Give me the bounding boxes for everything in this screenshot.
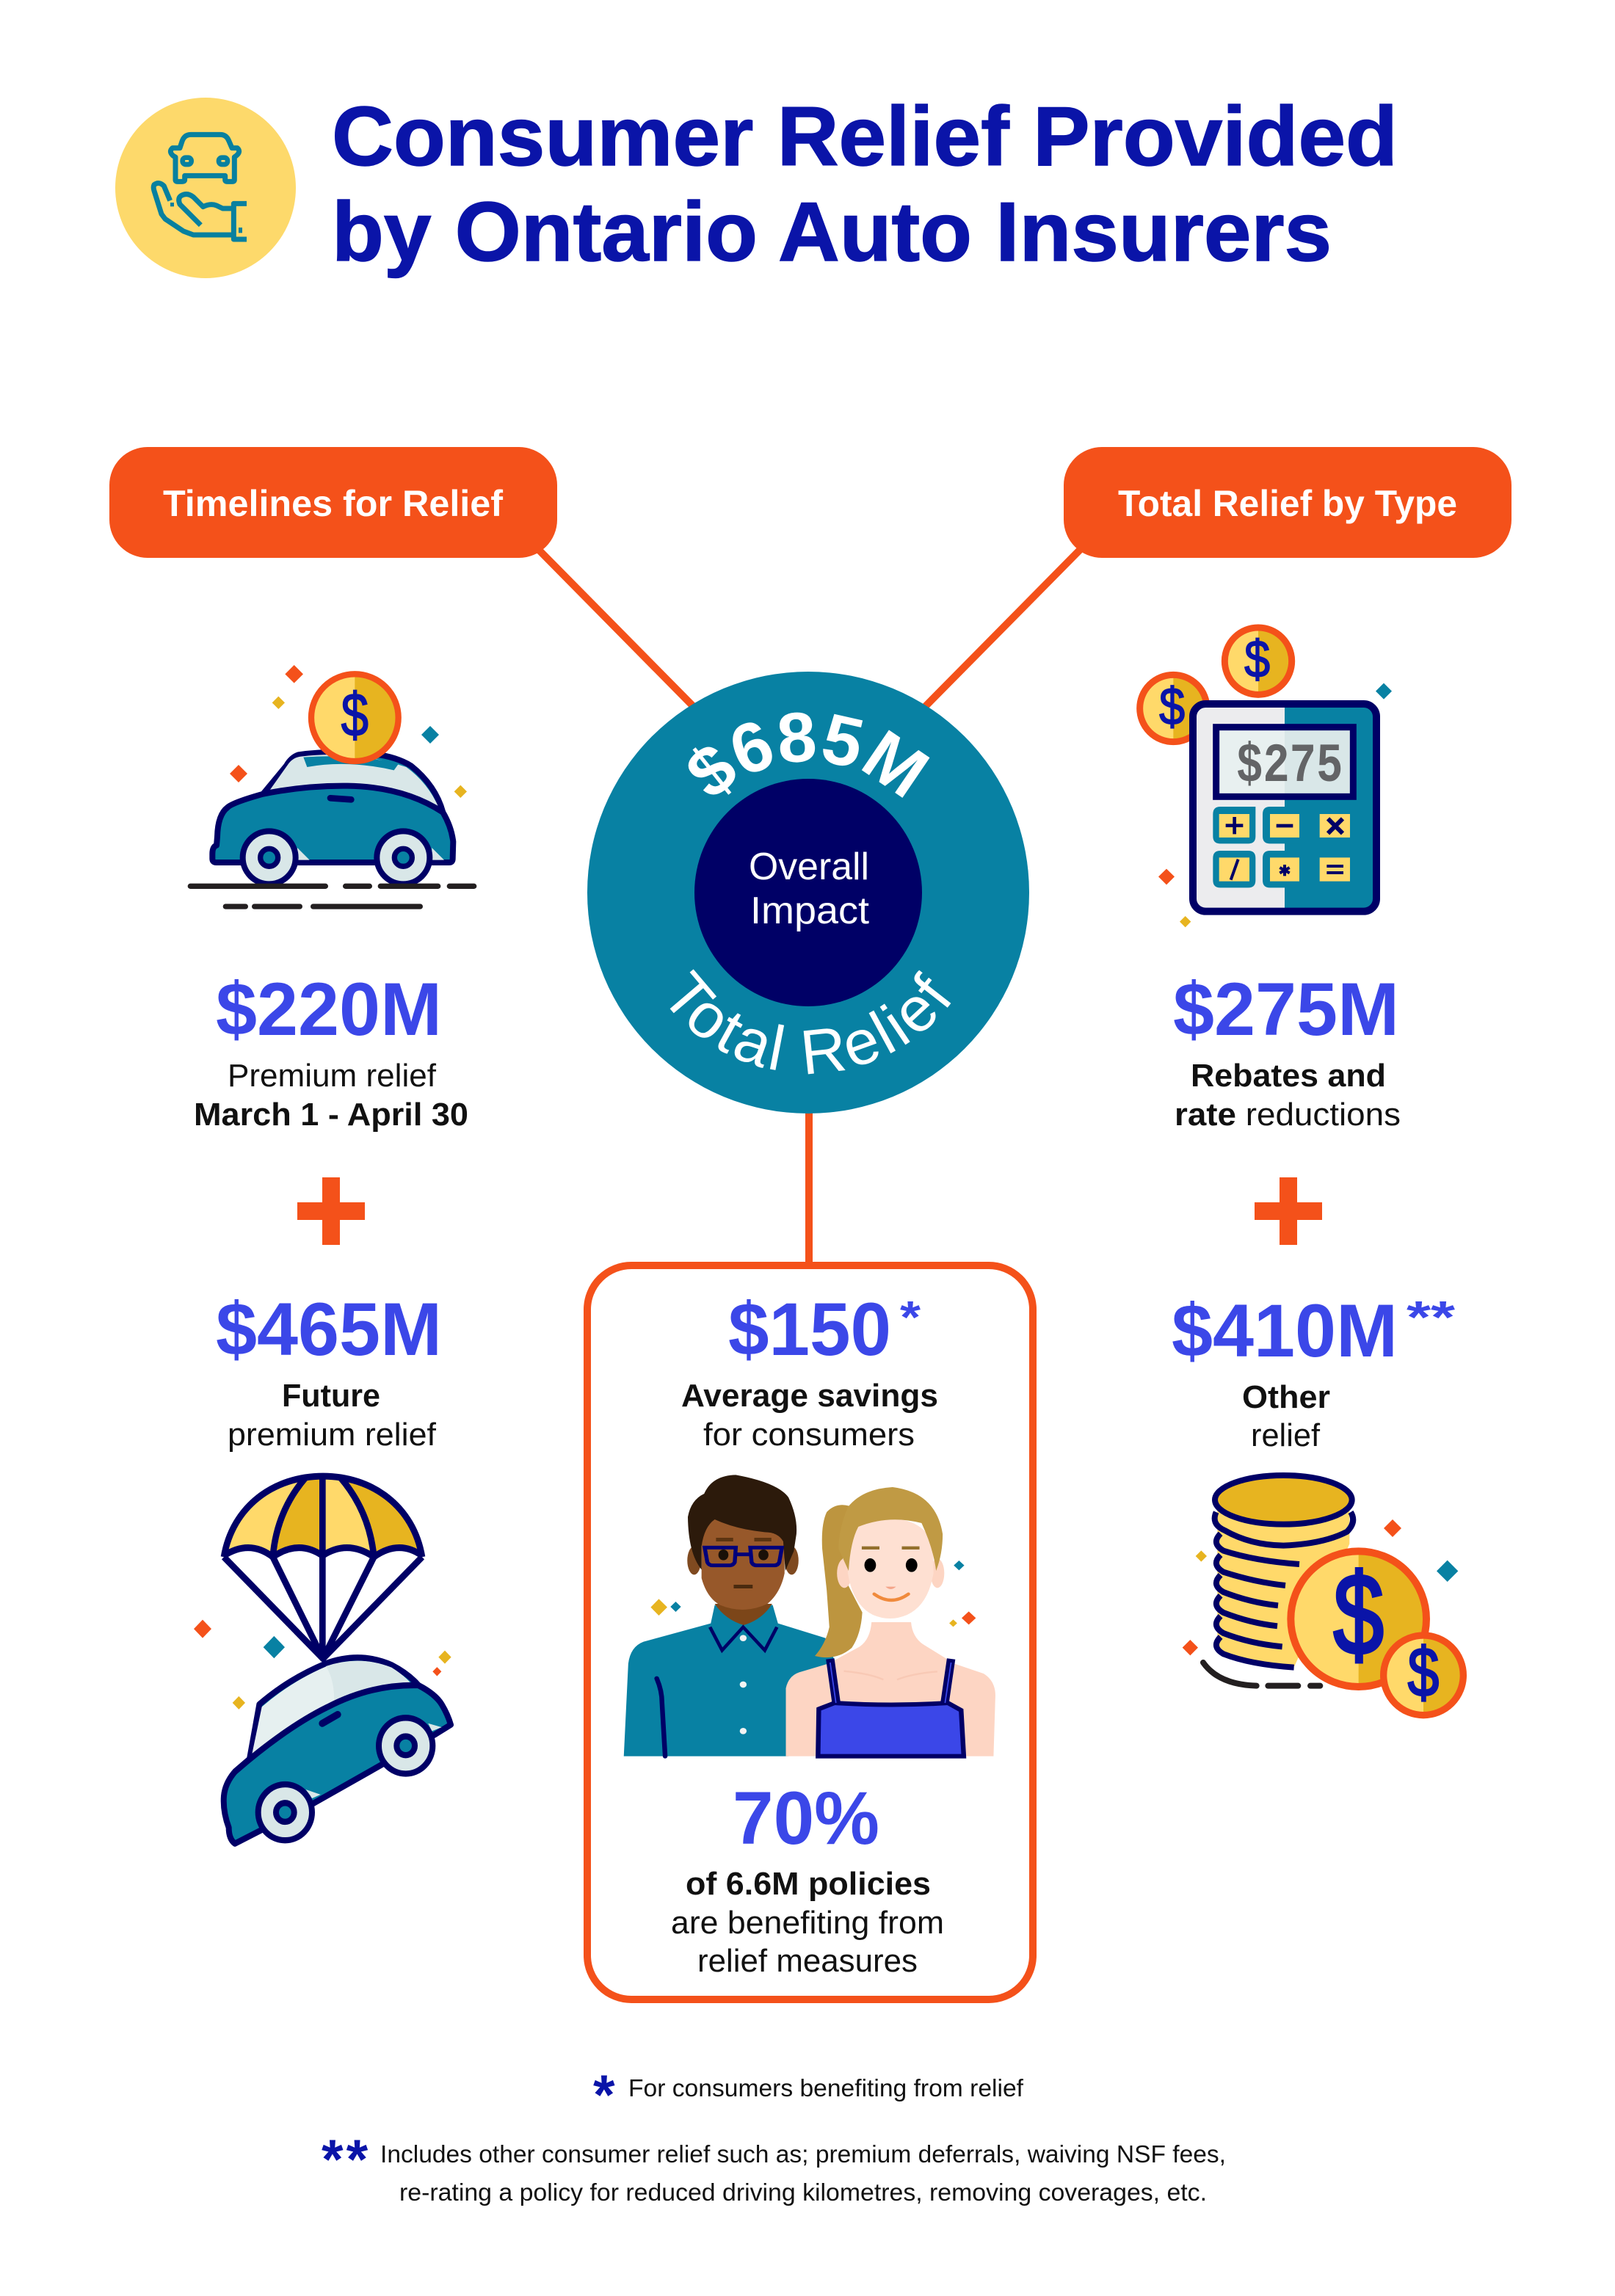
stat: $150 average savings: Average savings <box>681 1378 938 1414</box>
stat: $275M rebates <box>1173 967 1401 1133</box>
stat: $275M rebates: Rebates and <box>1191 1058 1386 1094</box>
stat: 70% of policies <box>671 1776 944 1979</box>
centre circle: overall impact: $685M <box>689 712 929 798</box>
footnote one <box>593 2064 1024 2126</box>
centre circle: overall impact: Impact <box>750 890 870 932</box>
stat: $150 average savings: for consumers <box>703 1417 915 1453</box>
icon: coin stack: $ <box>1408 1634 1439 1712</box>
icon: car with coin <box>190 665 474 907</box>
plus sign left <box>297 1177 365 1245</box>
icon: calculator with coins <box>1140 628 1392 927</box>
stat: $220M premium relief: Premium relief <box>228 1058 437 1094</box>
pill: total relief by type: Total Relief by Type <box>1118 483 1457 524</box>
centre circle: overall impact: Total Relief <box>669 969 951 1075</box>
icon: coin stack: $ <box>1333 1550 1384 1679</box>
stat: $410M other relief: relief <box>1251 1417 1321 1453</box>
pill: timelines for relief: Timelines for Relief <box>163 483 503 524</box>
connector: left pill to centre <box>532 543 697 711</box>
plus sign right <box>1255 1177 1322 1245</box>
footnote two: ** <box>322 2129 371 2191</box>
stat: $465M future premium relief <box>216 1287 442 1453</box>
footnote one: * <box>593 2064 615 2126</box>
footnote two <box>322 2129 1226 2206</box>
header icon: car in hand <box>115 98 296 278</box>
stat: $465M future premium relief: Future <box>282 1378 380 1414</box>
footnote two: Includes other consumer relief such as; premium deferrals, waiving NSF fees, <box>380 2140 1226 2168</box>
stat: $275M rebates: rate reductions <box>1175 1097 1401 1133</box>
stat: $410M other relief: Other <box>1242 1379 1330 1415</box>
illustration: two consumers <box>624 1475 995 1756</box>
stat: $410M other relief: $410M <box>1172 1289 1398 1373</box>
stat: $150 average savings: * <box>900 1293 921 1343</box>
icon: calculator with coins: $ <box>1159 677 1185 736</box>
stat: 70% of policies: 70% <box>733 1776 879 1860</box>
stat: $275M rebates: $275M <box>1173 967 1399 1051</box>
title: by Ontario Auto Insurers <box>332 186 1332 279</box>
stat: $465M future premium relief: premium relief <box>228 1417 437 1453</box>
footnote one: For consumers benefiting from relief <box>628 2074 1024 2101</box>
stat: $220M premium relief: March 1 - April 30 <box>194 1097 468 1133</box>
icon: calculator with coins: $275 <box>1236 735 1343 798</box>
stat: $220M premium relief <box>194 967 468 1133</box>
centre circle: overall impact: Overall <box>749 846 869 888</box>
icon: car with coin: $ <box>341 681 369 749</box>
connector: right pill to centre <box>921 543 1086 711</box>
icon: car with parachute <box>194 1476 451 1844</box>
connector: centre to savings box <box>805 1108 813 1267</box>
footnote two: re-rating a policy for reduced driving kilometres, removing coverages, etc. <box>399 2179 1207 2206</box>
stat: 70% of policies: are benefiting from <box>671 1905 944 1941</box>
stat: $150 average savings: $150 <box>728 1287 891 1371</box>
stat: $150 average savings <box>681 1287 938 1453</box>
icon: coin stack <box>1183 1475 1463 1715</box>
title <box>332 90 1398 279</box>
stat: $410M other relief <box>1172 1289 1456 1453</box>
pill: timelines for relief <box>109 447 557 558</box>
stat: 70% of policies: relief measures <box>697 1943 918 1979</box>
icon: calculator with coins: $ <box>1244 631 1270 689</box>
stat: $465M future premium relief: $465M <box>216 1287 442 1371</box>
pill: total relief by type <box>1064 447 1511 558</box>
title: Consumer Relief Provided <box>332 90 1398 184</box>
stat: $410M other relief: ** <box>1407 1293 1456 1343</box>
centre circle: overall impact <box>587 672 1029 1114</box>
stat: $220M premium relief: $220M <box>216 967 442 1051</box>
stat: 70% of policies: of 6.6M policies <box>686 1866 931 1902</box>
panel: average savings <box>587 1265 1033 1999</box>
